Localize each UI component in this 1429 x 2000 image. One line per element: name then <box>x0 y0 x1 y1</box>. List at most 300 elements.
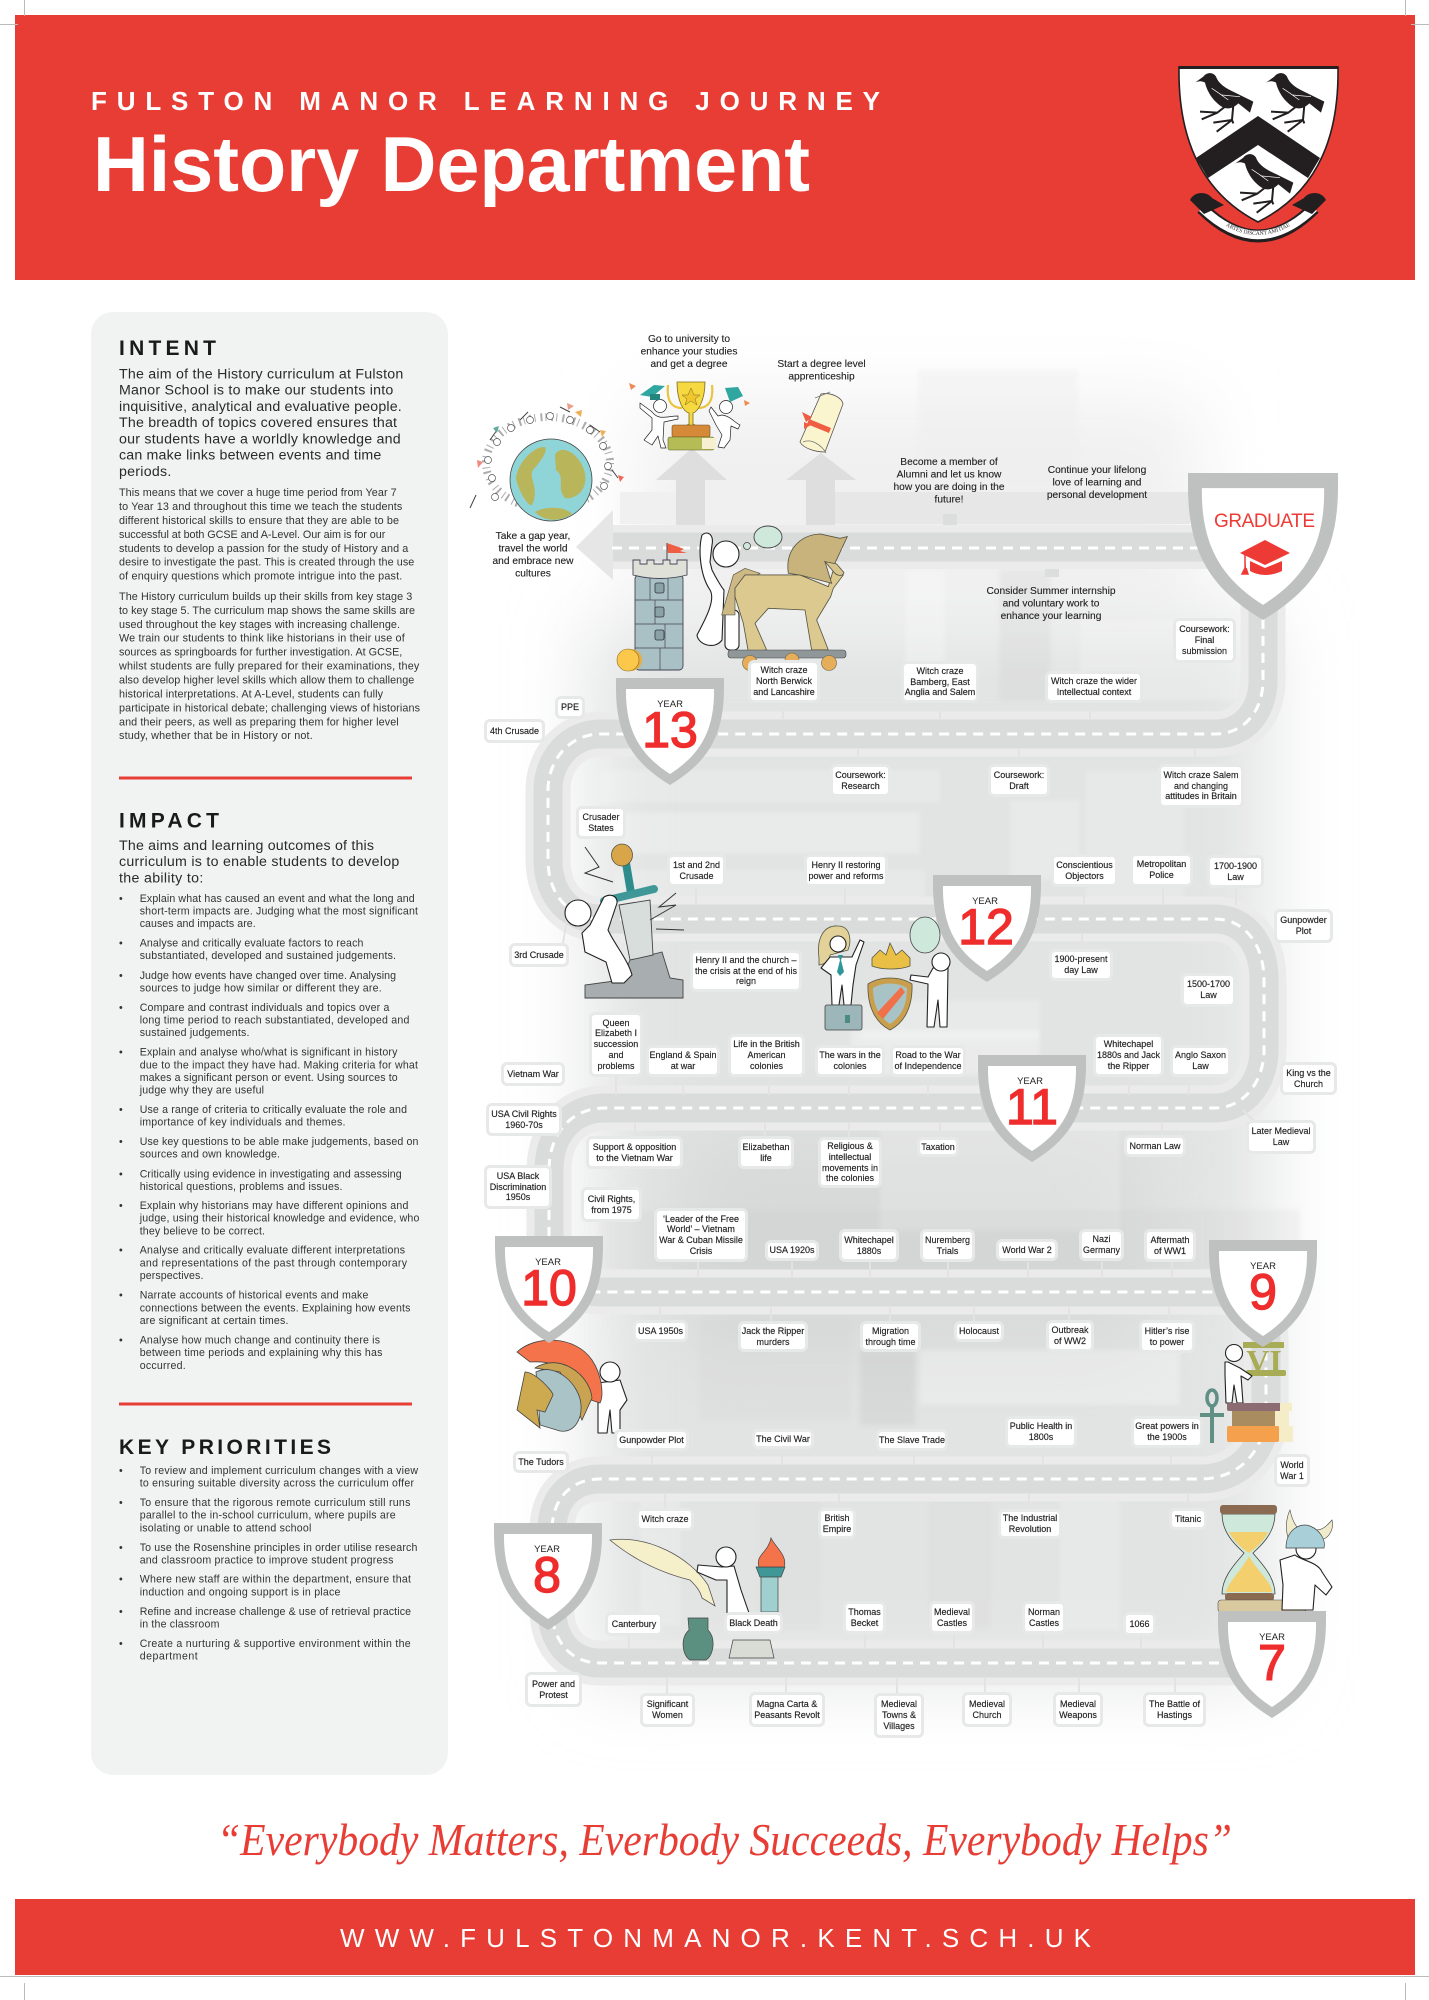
label: Medieval Weapons: Weapons <box>1059 1710 1097 1720</box>
shield: year 11 <box>978 1055 1086 1162</box>
text: gap year <box>493 531 574 580</box>
label: Queen Elizabeth I: problems <box>597 1061 634 1071</box>
label: The Civil War <box>752 1429 814 1449</box>
label: Witch craze Salem: attitudes in Britain <box>1165 791 1237 801</box>
text: apprenticeship: apprenticeship <box>788 372 855 382</box>
label: Medieval Church <box>962 1692 1012 1727</box>
label: The Industrial Revolution: The Industrial <box>1003 1513 1057 1523</box>
label: 1700-1900 Law: Law <box>1227 872 1244 882</box>
label: Witch craze Salem <box>1158 764 1244 808</box>
key priorities list: and classroom practice to improve student progress <box>140 1555 393 1567</box>
label: Support & opposition <box>586 1136 683 1169</box>
label: 1500-1700 Law: Law <box>1200 990 1217 1000</box>
label: 1st and 2nd Crusade: Crusade <box>679 870 714 880</box>
label: Religious & intellectual movements <box>818 1137 882 1188</box>
impact bullet list: historical questions, problems and issues. <box>140 1181 342 1193</box>
icon: books, ankh and roman numeral <box>1200 1342 1293 1443</box>
label: 1700-1900 Law <box>1207 855 1264 888</box>
icon: diploma scroll <box>800 392 843 453</box>
label: Leader of the Free World: War & Cuban Missile <box>659 1235 743 1245</box>
label: Significant Women: Women <box>652 1710 683 1720</box>
label: Medieval Church: Church <box>972 1710 1002 1720</box>
shield: year 12 <box>933 875 1041 982</box>
icon: graduation cap <box>1240 540 1290 575</box>
text: alumni <box>893 457 1005 506</box>
label: Significant Women: Significant <box>647 1699 688 1709</box>
key priorities list: • <box>119 1497 123 1509</box>
impact bullet list: and representations of the past through contemporary <box>140 1257 408 1269</box>
shield: graduate <box>1188 473 1338 620</box>
impact bullet list: • <box>119 1104 123 1116</box>
impact bullet list: sources to judge how similar or different they are. <box>140 983 382 995</box>
label: Norman Castles: Norman <box>1028 1607 1060 1617</box>
label: Gunpowder Plot (law) <box>1274 909 1333 943</box>
key priorities list <box>119 1465 418 1663</box>
impact bullet list: Explain and analyse who/what is significant in history <box>140 1047 398 1059</box>
label: England & Spain <box>646 1045 720 1077</box>
label: Coursework Final submission: Final <box>1195 635 1214 645</box>
label: Religious & intellectual movements: movements in <box>822 1162 878 1172</box>
text: go to university <box>641 334 737 370</box>
panel: text column <box>91 312 448 1775</box>
key priorities list: • <box>119 1638 123 1650</box>
key priorities list: To ensure that the rigorous remote curriculum still runs <box>140 1497 410 1509</box>
intent paragraph 1 <box>119 487 414 583</box>
impact bullet list: • <box>119 1334 123 1346</box>
label: Witch craze North Berwick <box>748 660 820 703</box>
school motto quote: “Everybody Matters, Everbody Succeeds, Everybody Helps” <box>217 1814 1232 1865</box>
label: Coursework Final submission: submission <box>1182 646 1227 656</box>
intent intro: our students have a worldly knowledge and <box>119 431 401 447</box>
label: Public Health: 1800s <box>1029 1432 1053 1442</box>
panel: impact <box>119 810 419 1372</box>
shield: year 8 <box>494 1523 602 1630</box>
intent paragraph 2: historical interpretations. At A-Level, students can fully <box>119 688 384 700</box>
text: alumni: how you are doing in the <box>893 482 1005 493</box>
label: Witch craze wider context: Witch craze the wider <box>1051 676 1137 686</box>
label: PPE <box>555 696 585 719</box>
shield: year 10 <box>495 1236 603 1343</box>
intent intro: The breadth of topics covered ensures that <box>119 415 397 431</box>
impact bullet list: occurred. <box>140 1360 186 1372</box>
faded books photograph background <box>590 370 1300 1680</box>
intent paragraph 2: The History curriculum builds up their skills from key stage 3 <box>119 591 412 603</box>
shield: year 8: YEAR <box>534 1544 560 1555</box>
impact bullet list: perspectives. <box>140 1270 203 1282</box>
label: Elizabethan life: Elizabethan <box>742 1142 790 1152</box>
label: Holocaust <box>954 1321 1004 1342</box>
shield: year 13: YEAR <box>657 699 683 710</box>
label: Medieval Weapons: Medieval <box>1060 1699 1096 1709</box>
label: 4th Crusade: 4th Crusade <box>490 726 539 736</box>
label: The Battle of Hastings: The Battle of <box>1149 1699 1200 1709</box>
shield: year 7 <box>1218 1611 1326 1718</box>
label: PPE: PPE <box>561 702 579 712</box>
impact bullet list: sustained judgements. <box>140 1027 249 1039</box>
label: Life in the British American colonies: colonies <box>750 1061 783 1071</box>
label: Medieval Castles <box>929 1601 975 1634</box>
intent paragraph 2: sources as springboards for further investigation. At GCSE, <box>119 647 402 659</box>
key priorities list: isolating or unable to attend school <box>140 1523 311 1535</box>
shield: year 7: 7 <box>1258 1635 1286 1691</box>
impact bullet list: Explain why historians may have different opinions and <box>140 1200 408 1212</box>
impact bullet list: Narrate accounts of historical events and make <box>140 1290 368 1302</box>
shield: year 9: 9 <box>1249 1264 1277 1320</box>
label: The Tudors: The Tudors <box>518 1457 564 1467</box>
impact intro: curriculum is to enable students to develop <box>119 854 399 870</box>
impact bullet list: • <box>119 1136 123 1148</box>
arrow: university <box>656 448 727 532</box>
label: Black Death <box>724 1612 783 1634</box>
impact bullet list: Use key questions to be able make judgements, based on <box>140 1136 418 1148</box>
panel: intent <box>118 337 421 742</box>
label: England & Spain: England & Spain <box>649 1050 717 1060</box>
label: The wars in the colonies <box>815 1045 885 1077</box>
label: USA Black Discrimination: 1950s <box>506 1192 530 1202</box>
label: Outbreak of WW2: Outbreak <box>1051 1325 1089 1335</box>
impact bullet list: • <box>119 1002 123 1014</box>
label: 1st and 2nd Crusade: 1st and 2nd <box>673 860 720 870</box>
intent paragraph 1: students to develop a passion for the study of History and a <box>119 543 408 555</box>
text: go to university: Go to university to <box>648 334 730 345</box>
label: Witch craze Salem: and changing <box>1174 781 1228 791</box>
shield: year 10: 10 <box>521 1260 577 1316</box>
label: Witch craze Salem: Witch craze Salem <box>1163 770 1239 780</box>
label: The Tudors <box>513 1451 569 1473</box>
label: Later Medieval Law: Later Medieval <box>1251 1126 1311 1136</box>
impact bullet list <box>119 893 419 1372</box>
label: Anglo Saxon Law: Law <box>1192 1061 1209 1071</box>
label: Medieval Towns & Villages: Medieval <box>881 1699 917 1709</box>
roman numeral VI: VI <box>1246 1343 1282 1379</box>
intent paragraph 2: We train our students to think like historians in their use of <box>119 633 406 645</box>
label: British Empire: British <box>824 1513 850 1523</box>
label: Medieval Castles: Castles <box>937 1618 967 1628</box>
label: The Slave Trade: The Slave Trade <box>879 1435 945 1445</box>
label: Titanic <box>1169 1508 1207 1530</box>
text: apprenticeship: Start a degree level <box>777 359 866 370</box>
key priorities list: in the classroom <box>140 1619 220 1631</box>
label: Vietnam War <box>501 1062 565 1086</box>
label: King vs the Church: King vs the <box>1286 1068 1331 1078</box>
label: Henry II and the church: the crisis at the end of his <box>695 966 797 976</box>
label: Canterbury <box>605 1612 663 1636</box>
label: Public Health: Public Health in <box>1010 1421 1072 1431</box>
intent paragraph 2: used throughout the key stages with increasing challenge. <box>119 619 400 631</box>
label: Road to the War of Independence <box>890 1045 966 1077</box>
text: lifelong learning: personal development <box>1047 490 1147 501</box>
intent paragraph 2: participate in historical debate; challenging views of historians <box>119 702 421 714</box>
text: summer internship: enhance your learning <box>1001 611 1102 622</box>
key priorities list: department <box>140 1651 198 1663</box>
shield: year 13: 13 <box>642 702 698 758</box>
label: 1st and 2nd Crusade <box>667 854 726 887</box>
label: Thomas Becket <box>843 1601 886 1634</box>
key priorities list: Refine and increase challenge & use of retrieval practice <box>140 1606 411 1618</box>
label: Witch craze: Witch craze <box>641 1514 688 1524</box>
intent paragraph 2: study, whether that be in History or not. <box>119 730 313 742</box>
arrow: apprenticeship <box>786 453 856 532</box>
shield: year 8: 8 <box>533 1547 561 1603</box>
label: Norman Law <box>1124 1135 1186 1157</box>
impact bullet list: • <box>119 938 123 950</box>
label: Coursework Final submission: Coursework: <box>1179 624 1230 634</box>
label: Henry II and the church: reign <box>736 976 756 986</box>
label: Leader of the Free World: ‘Leader of the Free <box>663 1214 739 1224</box>
label: British Empire: Empire <box>823 1524 851 1534</box>
icon: castle tower with coin <box>617 543 687 671</box>
label: Migration through time: Migration <box>872 1326 909 1336</box>
label: Metropolitan Police: Police <box>1149 870 1174 880</box>
icon: judge, crown, shield and figure <box>818 917 950 1030</box>
label: Gunpowder Plot <box>614 1429 689 1451</box>
key priorities list: To use the Rosenshine principles in order utilise research <box>140 1542 417 1554</box>
impact intro: The aims and learning outcomes of this <box>119 838 374 854</box>
label: 3rd Crusade: 3rd Crusade <box>514 950 564 960</box>
label: Life in the British American colonies: Life in the British <box>733 1039 800 1049</box>
label: USA Black Discrimination: Discrimination <box>490 1182 546 1192</box>
header banner <box>15 15 1415 280</box>
label: Taxation: Taxation <box>921 1142 955 1152</box>
key priorities list: • <box>119 1574 123 1586</box>
label: Conscientious Objectors <box>1051 854 1118 887</box>
road: top branch with arrows <box>576 448 1264 580</box>
label: Aftermath of WW1: of WW1 <box>1154 1246 1186 1256</box>
key priorities list: • <box>119 1606 123 1618</box>
key priorities list: parallel to the in-school curriculum, where pupils are <box>140 1510 396 1522</box>
label: Significant Women <box>640 1693 695 1727</box>
label: Henry II and the church <box>690 950 802 992</box>
label: Crusader States <box>576 806 626 839</box>
text: summer internship: Consider Summer internship <box>986 586 1116 597</box>
label: Life in the British American colonies <box>728 1034 805 1077</box>
text: gap year: travel the world <box>498 544 568 554</box>
key priorities list: • <box>119 1542 123 1554</box>
label: Elizabethan life <box>738 1136 794 1169</box>
label: Jack the Ripper murders: Jack the Ripper <box>742 1326 804 1336</box>
shield: year 9 <box>1209 1240 1317 1347</box>
label: Witch craze North Berwick: and Lancashire <box>753 687 815 697</box>
impact bullet list: importance of key individuals and themes. <box>140 1117 345 1129</box>
label: Coursework Research: Research <box>841 780 880 790</box>
label: Vietnam War: Vietnam War <box>507 1069 559 1079</box>
label: Nuremberg Trials: Trials <box>937 1246 958 1256</box>
label: Medieval Church: Medieval <box>969 1699 1005 1709</box>
label: Canterbury: Canterbury <box>612 1619 656 1629</box>
label: 1066: 1066 <box>1129 1619 1150 1629</box>
label: World War 2 <box>996 1239 1058 1261</box>
label: Thomas Becket: Becket <box>851 1618 878 1628</box>
label: Hitler's rise to power: Hitler’s rise <box>1145 1326 1189 1336</box>
text: go to university: and get a degree <box>650 359 728 370</box>
label: The Slave Trade <box>876 1429 948 1451</box>
intent intro: can make links between events and time <box>119 448 381 464</box>
text: lifelong learning <box>1047 465 1147 501</box>
label: 4th Crusade <box>484 719 545 743</box>
label: Hitler's rise to power <box>1139 1320 1195 1353</box>
label: Gunpowder Plot (law): Gunpowder <box>1280 915 1327 925</box>
label: USA 1920s: USA 1920s <box>769 1245 815 1255</box>
text: gap year: and embrace new <box>493 556 574 567</box>
intent paragraph 2: also develop higher level skills which allow them to challenge <box>119 675 414 687</box>
label: Metropolitan Police: Metropolitan <box>1137 859 1186 869</box>
label: Henry II restoring <box>804 854 888 887</box>
key priorities list: induction and ongoing support is in place <box>140 1587 340 1599</box>
impact bullet list: Use a range of criteria to critically evaluate the role and <box>140 1104 407 1116</box>
label: USA Civil Rights: 1960-70s <box>505 1120 543 1130</box>
impact bullet list: makes a significant person or event. Using sources to <box>140 1072 398 1084</box>
impact bullet list: judge why they are useful <box>139 1085 264 1097</box>
label: Nazi Germany: Germany <box>1083 1245 1120 1255</box>
intent paragraph 2: and their peers, as well as preparing them for higher level <box>119 716 399 728</box>
impact bullet list: • <box>119 1245 123 1257</box>
shield: year 11: YEAR <box>1017 1076 1043 1087</box>
intent paragraph 1: successful at both GCSE and A-Level. Our aim is for our <box>119 529 386 541</box>
label: Outbreak of WW2: of WW2 <box>1054 1336 1086 1346</box>
impact bullet list: • <box>119 1047 123 1059</box>
label: Jack the Ripper murders: murders <box>756 1336 790 1346</box>
label: British Empire <box>818 1508 856 1539</box>
impact intro <box>119 838 399 886</box>
intent intro <box>119 366 403 480</box>
label: Witch craze wider context: Intellectual context <box>1057 687 1131 697</box>
label: Medieval Towns & Villages <box>874 1693 924 1738</box>
label: Taxation <box>917 1137 959 1157</box>
icon: quill, torch, vase and pedestal <box>610 1538 785 1660</box>
road: serpentine journey <box>548 560 1270 1663</box>
label: Coursework Research: Coursework: <box>835 770 886 780</box>
impact bullet list: substantiated, developed and sustained judgements. <box>140 950 396 962</box>
shield: year 9: YEAR <box>1250 1261 1276 1272</box>
label: Civil Rights from 1975 <box>581 1187 642 1222</box>
impact bullet list: due to the impact they have had. Making criteria for what <box>140 1059 418 1071</box>
label: Henry II and the church: Henry II and the church – <box>695 955 797 965</box>
label: Migration through time <box>860 1321 921 1352</box>
shield: year 7: YEAR <box>1259 1632 1285 1643</box>
label: Thomas Becket: Thomas <box>848 1607 881 1617</box>
label: USA Civil Rights <box>486 1103 562 1136</box>
label: Leader of the Free World <box>654 1208 748 1262</box>
label: Norman Castles <box>1022 1601 1066 1634</box>
intent paragraph 1: of enquiry questions which promote intrigue into the past. <box>119 571 402 583</box>
text: alumni: Alumni and let us know <box>897 470 1002 480</box>
label: Whitechapel and Jack the Ripper <box>1093 1034 1164 1077</box>
label: Witch craze North Berwick: Witch craze <box>760 665 808 675</box>
shield: year 13 <box>616 678 724 785</box>
label: Crusader States: Crusader <box>582 812 620 822</box>
label: Later Medieval Law <box>1246 1120 1316 1154</box>
label: Gunpowder Plot (law): Plot <box>1296 926 1311 936</box>
label: Queen Elizabeth I: Queen <box>602 1018 630 1028</box>
label: Power and Protest: Protest <box>539 1690 568 1700</box>
impact bullet list: between time periods and explaining why this has <box>140 1347 382 1359</box>
impact bullet list: long time period to reach substantiated, developed and <box>140 1015 409 1027</box>
school crest <box>1178 66 1339 242</box>
website url: WWW.FULSTONMANOR.KENT.SCH.UK <box>340 1923 1092 1953</box>
label: Nuremberg Trials: Nuremberg <box>925 1235 970 1245</box>
impact bullet list: sources and own knowledge. <box>140 1149 280 1161</box>
label: Medieval Weapons <box>1053 1692 1103 1727</box>
label: Whitechapel and Jack the Ripper: 1880s and Jack <box>1097 1050 1160 1060</box>
intent paragraph 1: This means that we cover a huge time period from Year 7 <box>119 487 397 499</box>
intent intro: Manor School is to make our students into <box>119 383 393 399</box>
label: Metropolitan Police <box>1130 853 1193 887</box>
label: USA Black Discrimination: USA Black <box>497 1171 539 1181</box>
impact intro: the ability to: <box>119 870 203 886</box>
label: Jack the Ripper murders <box>738 1321 808 1352</box>
label: Civil Rights from 1975: from 1975 <box>591 1204 632 1214</box>
label: The Industrial Revolution: Revolution <box>1009 1524 1051 1534</box>
impact bullet list: are significant at certain times. <box>140 1315 288 1327</box>
label: Crusader States: States <box>588 822 614 832</box>
label: Holocaust: Holocaust <box>959 1326 999 1336</box>
label: Queen Elizabeth I: succession <box>594 1039 638 1049</box>
label: The Battle of Hastings <box>1143 1692 1206 1727</box>
icon: spartan helmet with figure <box>517 1340 627 1433</box>
impact bullet list: short-term impacts are. Judging what the most significant <box>140 906 418 918</box>
label: Witch craze Bamberg <box>901 661 979 703</box>
label: Whitechapel 1880s: 1880s <box>857 1246 881 1256</box>
label: 1500-1700 Law <box>1181 973 1236 1007</box>
text: gap year: Take a gap year, <box>496 531 570 542</box>
label: Religious & intellectual movements: the colonies <box>826 1173 874 1183</box>
label: Aftermath of WW1 <box>1144 1229 1196 1262</box>
label: The Battle of Hastings: Hastings <box>1157 1710 1192 1720</box>
impact bullet list: causes and impacts are. <box>140 918 256 930</box>
label: Norman Law: Norman Law <box>1129 1141 1181 1151</box>
text: alumni: future! <box>935 494 963 506</box>
label: 1900-present day Law: 1900-present <box>1054 954 1108 964</box>
icon: trophy with students <box>629 382 750 450</box>
label: Support & opposition: to the Vietnam War <box>596 1152 673 1162</box>
impact bullet list: they believe to be correct. <box>140 1225 265 1237</box>
label: Conscientious Objectors: Conscientious <box>1056 860 1113 870</box>
text: alumni: Become a member of <box>900 457 998 468</box>
label: Witch craze Bamberg: Witch craze <box>916 666 964 676</box>
label: Religious & intellectual movements: intellectual <box>829 1152 871 1162</box>
label: Great powers: the 1900s <box>1147 1432 1187 1442</box>
label: Medieval Castles: Medieval <box>934 1607 970 1617</box>
icon: hourglass with viking <box>1218 1505 1333 1612</box>
label: USA Civil Rights: USA Civil Rights <box>491 1109 557 1119</box>
impact bullet list: Critically using evidence in investigating and assessing <box>140 1168 402 1180</box>
impact heading: IMPACT <box>119 810 219 832</box>
label: Queen Elizabeth I <box>589 1012 643 1077</box>
label: Witch craze Bamberg: Anglia and Salem <box>905 687 975 697</box>
intent paragraph 1: desire to investigate the past. This is created through the use <box>119 557 414 569</box>
label: Coursework Draft <box>988 764 1050 797</box>
label: USA 1950s <box>633 1320 688 1342</box>
label: Henry II restoring: power and reforms <box>808 870 884 880</box>
icon: sword in the stone with figure <box>565 844 684 998</box>
text: summer internship: and voluntary work to <box>1003 598 1100 610</box>
label: Whitechapel 1880s: Whitechapel <box>844 1235 894 1245</box>
impact bullet list: Explain what has caused an event and what the long and <box>140 893 415 905</box>
label: Magna Carta: Magna Carta & <box>757 1699 817 1709</box>
label: King vs the Church <box>1280 1062 1337 1095</box>
label: Magna Carta <box>749 1692 825 1727</box>
panel: key priorities <box>119 1436 418 1663</box>
impact bullet list: Compare and contrast individuals and topics over a <box>140 1002 389 1014</box>
label: The wars in the colonies: The wars in the <box>819 1050 881 1060</box>
impact bullet list: Analyse how much change and continuity there is <box>140 1334 380 1346</box>
label: Black Death: Black Death <box>729 1618 778 1628</box>
label: Anglo Saxon Law: Anglo Saxon <box>1175 1050 1226 1060</box>
intent paragraph 1: to Year 13 and throughout this time we teach the students <box>119 501 403 513</box>
shield: year 12: YEAR <box>972 896 998 907</box>
label connectors <box>563 703 1255 1693</box>
key priorities heading: KEY PRIORITIES <box>119 1436 331 1459</box>
